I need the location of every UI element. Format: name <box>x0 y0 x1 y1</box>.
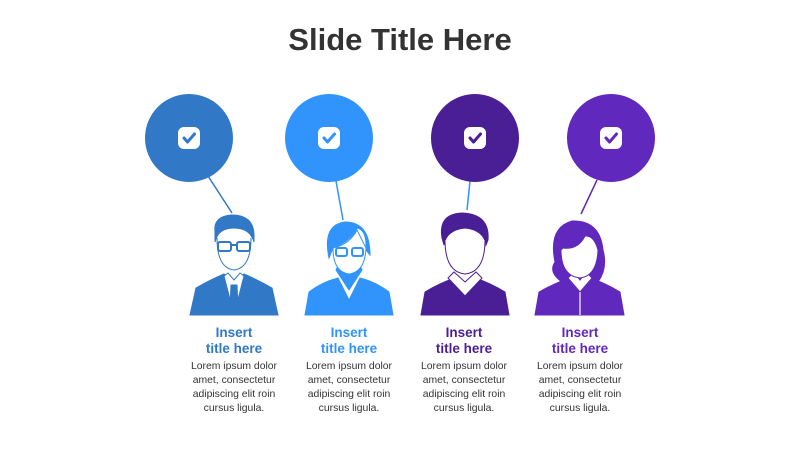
text block 3 <box>421 325 507 414</box>
text block 3: Insert <box>446 325 482 340</box>
circle 2 <box>285 94 373 220</box>
title: Slide Title Here <box>288 22 512 57</box>
circle 1 <box>145 94 233 213</box>
avatar 2: woman with glasses <box>305 222 393 315</box>
text block 1: title here <box>206 341 262 356</box>
avatar 4: woman with curly hair <box>535 221 624 315</box>
text block 4: Lorem ipsum dolor amet, consectetur adipiscing elit roin cursus ligula. <box>537 361 623 414</box>
text block 4 <box>537 325 623 414</box>
text block 2 <box>306 325 392 414</box>
text block 2: Insert <box>331 325 367 340</box>
circle 4 <box>567 94 655 214</box>
text block 3: Lorem ipsum dolor amet, consectetur adipiscing elit roin cursus ligula. <box>421 361 507 414</box>
text block 3: title here <box>436 341 492 356</box>
avatar 3: man with sweater <box>421 213 509 315</box>
circle 3 <box>431 94 519 210</box>
text block 4: title here <box>552 341 608 356</box>
text block 1: Insert <box>216 325 252 340</box>
text block 2: Lorem ipsum dolor amet, consectetur adipiscing elit roin cursus ligula. <box>306 361 392 414</box>
avatar 1: man with glasses and tie <box>190 215 278 315</box>
text block 2: title here <box>321 341 377 356</box>
text block 1: Lorem ipsum dolor amet, consectetur adipiscing elit roin cursus ligula. <box>191 361 277 414</box>
text block 1 <box>191 325 277 414</box>
text block 4: Insert <box>562 325 598 340</box>
